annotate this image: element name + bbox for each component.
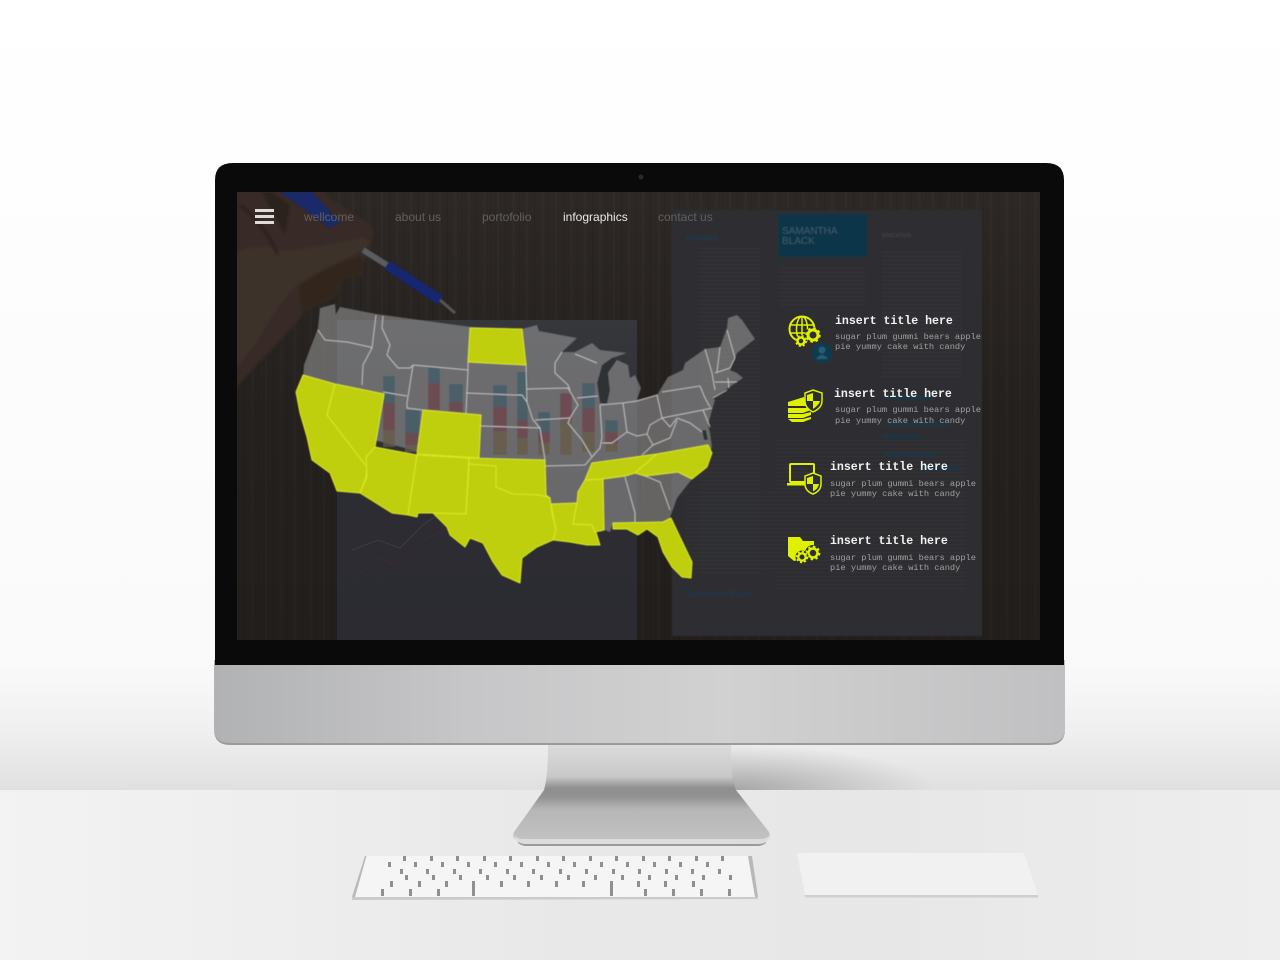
monitor bezel bbox=[215, 163, 1064, 665]
Chesapeake Bay bbox=[702, 430, 708, 440]
icon: globe and gears bbox=[790, 316, 821, 347]
monitor chin bbox=[214, 660, 1065, 744]
desk surface bbox=[0, 790, 1280, 960]
state borders bbox=[318, 315, 737, 522]
description: sugar plum gummi bears apple bbox=[830, 553, 976, 563]
item 1 bbox=[790, 315, 981, 352]
description: pie yummy cake with candy bbox=[830, 489, 960, 499]
right document bbox=[672, 210, 982, 636]
monitor stand bbox=[513, 744, 770, 846]
navigation bbox=[303, 210, 713, 224]
description bbox=[830, 553, 976, 573]
heading: insert title here bbox=[830, 461, 948, 474]
heading: insert title here bbox=[835, 315, 953, 328]
hamburger menu bbox=[255, 209, 274, 224]
description: pie yummy cake with candy bbox=[835, 416, 965, 426]
icon: stack with shield bbox=[788, 390, 822, 422]
keyboard bbox=[352, 856, 758, 900]
Mississippi bbox=[573, 479, 604, 532]
screen bbox=[237, 192, 1040, 640]
hand holding pen bbox=[230, 185, 373, 395]
description: sugar plum gummi bears apple bbox=[835, 332, 981, 342]
Colorado bbox=[417, 410, 481, 458]
profile badge bbox=[812, 343, 832, 363]
wood shading bbox=[237, 192, 1040, 640]
item 3 bbox=[787, 461, 976, 499]
US map bbox=[296, 304, 755, 583]
description: sugar plum gummi bears apple bbox=[830, 479, 976, 489]
description: pie yummy cake with candy bbox=[835, 342, 965, 352]
description: pie yummy cake with candy bbox=[830, 563, 960, 573]
stacked bars bbox=[383, 367, 618, 455]
wood background bbox=[237, 192, 1040, 640]
Texas panhandle border bbox=[469, 464, 550, 498]
item 2 bbox=[788, 388, 981, 426]
Nevada bbox=[327, 384, 384, 467]
line chart bbox=[355, 515, 470, 577]
wall shadow behind stand bbox=[535, 745, 935, 790]
gray states base bbox=[303, 304, 755, 532]
Louisiana bbox=[551, 503, 600, 545]
icon: folder with gears bbox=[788, 537, 821, 564]
left document bbox=[337, 320, 637, 640]
Arizona bbox=[360, 447, 417, 515]
icon: laptop with shield bbox=[787, 464, 821, 494]
highlighted states bbox=[296, 328, 712, 583]
description bbox=[835, 405, 981, 426]
resume header bbox=[778, 214, 867, 257]
navigation: about us bbox=[395, 210, 441, 224]
description bbox=[835, 332, 981, 352]
item 4 bbox=[788, 535, 976, 573]
navigation: infographics bbox=[563, 210, 628, 224]
heading: insert title here bbox=[834, 388, 952, 401]
monitor bbox=[214, 163, 1065, 745]
camera bbox=[638, 174, 644, 180]
Tennessee bbox=[585, 454, 657, 480]
Lake Michigan bbox=[597, 357, 617, 404]
New Mexico bbox=[408, 455, 469, 517]
California bbox=[296, 375, 367, 493]
teal highlights bbox=[884, 396, 932, 399]
signature: Samantha Black bbox=[687, 589, 753, 600]
Oklahoma and Texas bbox=[433, 458, 556, 583]
right document: BLACK bbox=[782, 236, 815, 247]
description bbox=[830, 479, 976, 499]
navigation: wellcome bbox=[303, 210, 354, 224]
right document: EXPERIENCE bbox=[686, 236, 719, 242]
trackpad bbox=[797, 853, 1038, 898]
description: sugar plum gummi bears apple bbox=[835, 405, 981, 415]
right document: EDUCATION bbox=[882, 233, 911, 239]
heading: insert title here bbox=[830, 535, 948, 548]
North Carolina bbox=[635, 445, 712, 479]
North Dakota bbox=[468, 328, 526, 365]
pen bbox=[280, 192, 455, 313]
Florida bbox=[613, 518, 692, 578]
navigation: portofolio bbox=[482, 210, 532, 224]
navigation: contact us bbox=[658, 210, 713, 224]
right document: SAMANTHA bbox=[782, 226, 838, 237]
